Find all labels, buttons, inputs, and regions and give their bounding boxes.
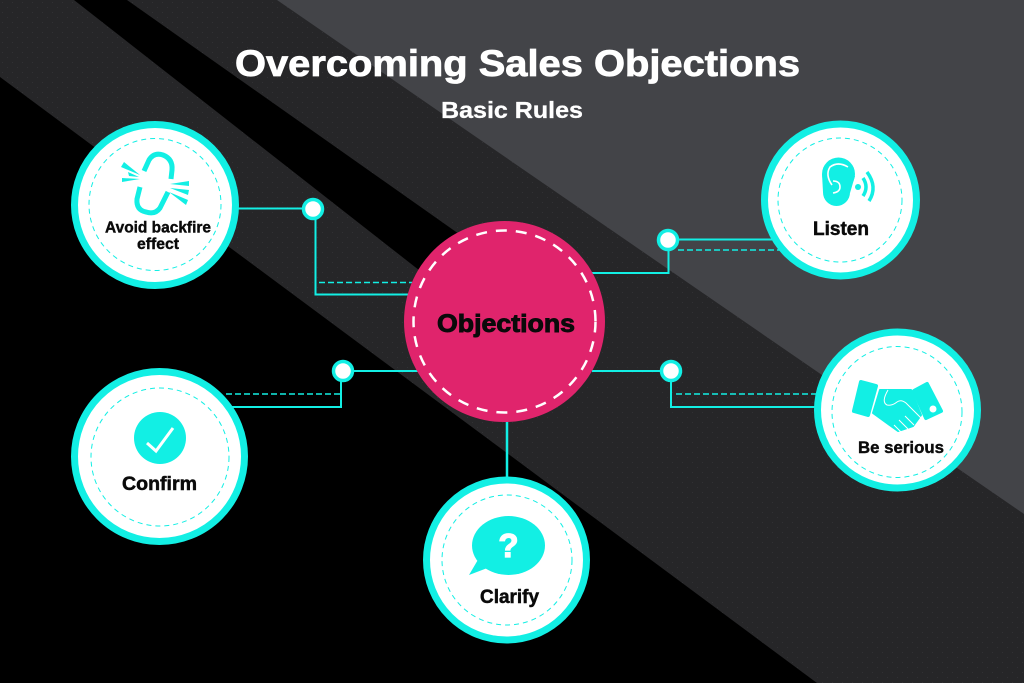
node: avoid backfire effect: Avoid backfire <box>105 220 211 236</box>
central circle: objections: Objections <box>437 310 575 338</box>
icon: broken chain link <box>121 154 189 213</box>
connector: clarify to objections <box>506 420 508 480</box>
connector: confirm to objections <box>225 362 420 407</box>
icon: check mark <box>134 412 186 464</box>
node: avoid backfire effect: effect <box>137 236 179 253</box>
connector: listen to objections <box>592 230 780 273</box>
node: be serious: Be serious <box>858 439 944 457</box>
subtitle: Basic Rules <box>441 97 583 123</box>
title: Overcoming Sales Objections <box>235 43 800 84</box>
node: clarify: Clarify <box>480 587 539 608</box>
icon: ear with sound waves <box>822 158 873 206</box>
node: confirm <box>74 372 244 542</box>
icon: handshake <box>854 382 941 432</box>
node: listen <box>764 124 916 276</box>
node: confirm: Confirm <box>122 474 197 495</box>
central circle: objections <box>404 221 605 422</box>
node: avoid backfire effect <box>74 124 236 286</box>
node: listen: Listen <box>813 219 869 240</box>
connector: avoid backfire to objections <box>238 200 412 294</box>
icon: speech bubble with question mark: ? <box>498 527 519 564</box>
node: clarify <box>426 480 586 640</box>
node: be serious <box>818 332 978 488</box>
icon: speech bubble with question mark <box>469 516 545 575</box>
connector: be serious to objections <box>592 362 820 407</box>
